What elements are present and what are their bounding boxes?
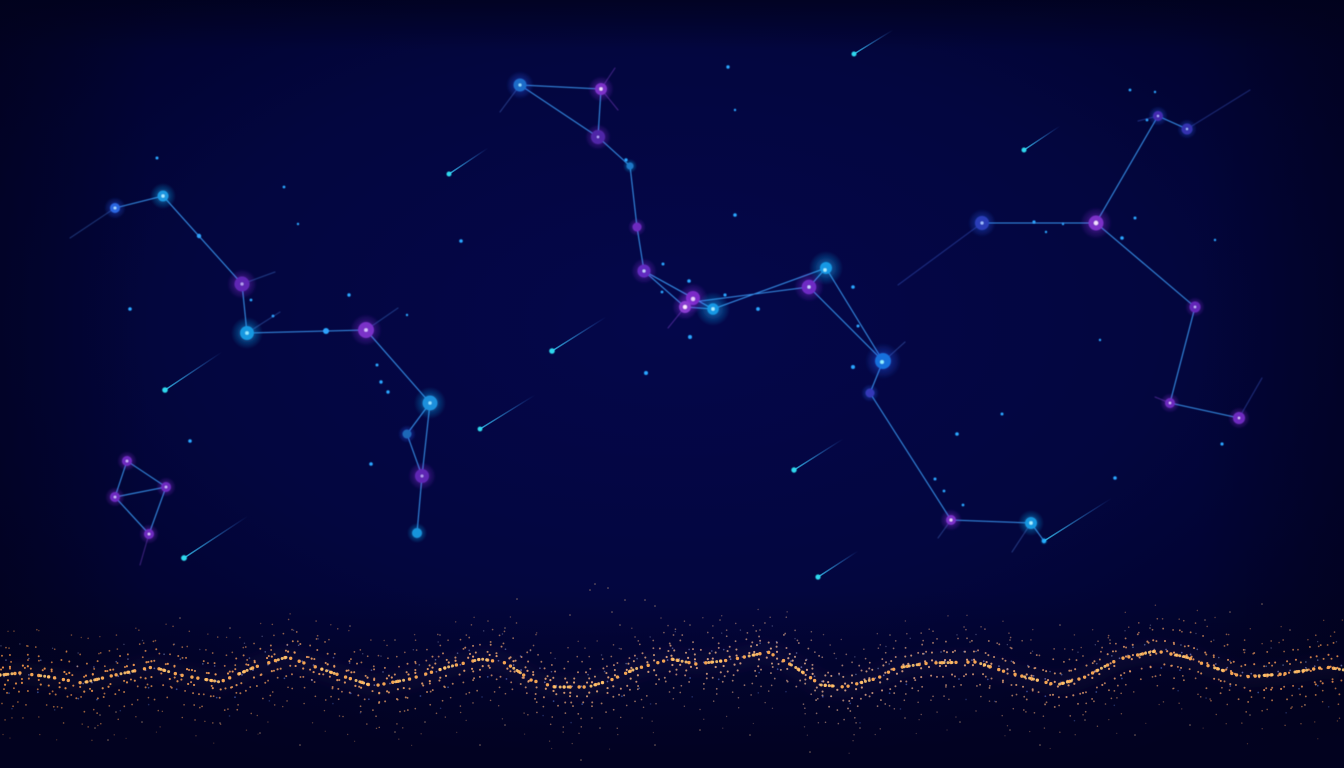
- bright wave crest: [0, 651, 1344, 687]
- particle wave: [0, 584, 1344, 760]
- scattered particle cloud: [1, 603, 1344, 756]
- constellation: small kite: [105, 451, 176, 565]
- constellation: central winding chain: [500, 68, 1048, 552]
- wave glow: [0, 651, 1344, 687]
- cool blue-grey particles: [1, 622, 1344, 725]
- constellation: right chain: [898, 90, 1262, 429]
- small background stars: [128, 65, 1224, 543]
- constellation: left chain: [70, 183, 446, 543]
- shooting stars: [162, 30, 1112, 580]
- extra sparse particles: [95, 584, 1305, 760]
